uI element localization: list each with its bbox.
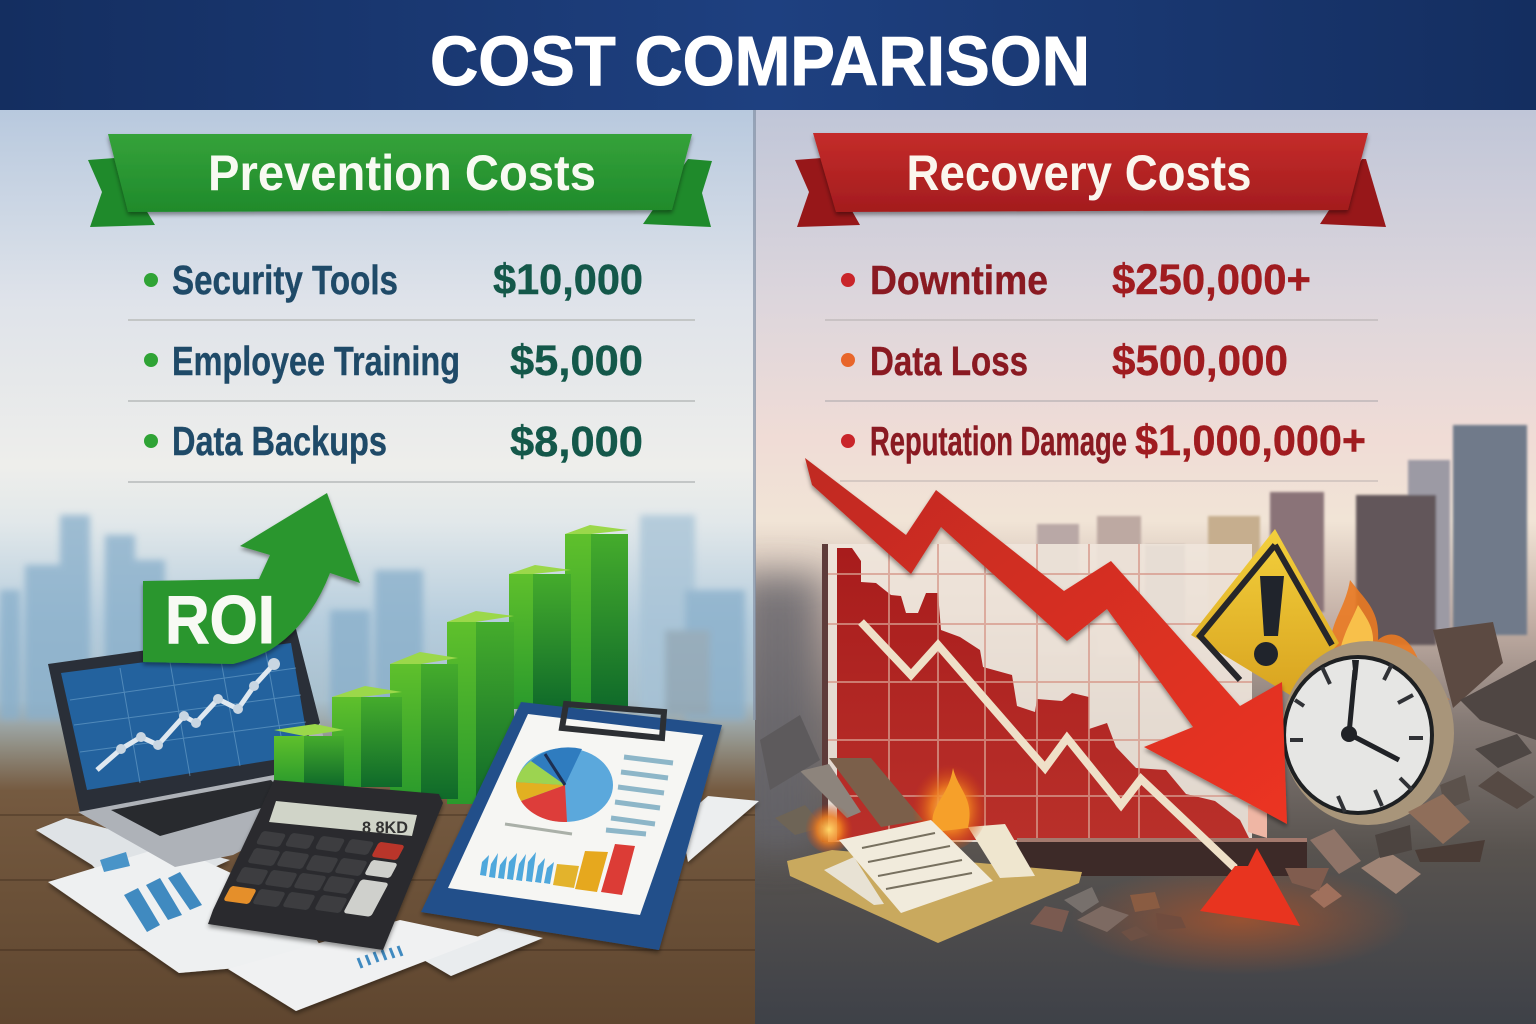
warning sign xyxy=(1191,529,1339,695)
arrow: falling cost xyxy=(805,458,1287,824)
panel: recovery background xyxy=(755,110,1536,1024)
right city skyline xyxy=(1037,425,1527,656)
banner: recovery costs xyxy=(795,133,1386,227)
banner: prevention costs xyxy=(88,134,712,227)
rock behind clock xyxy=(1433,622,1503,708)
row: security tools: $10,000 xyxy=(493,256,643,304)
row: security tools xyxy=(144,256,643,304)
flame: rubble left xyxy=(805,801,853,853)
bar 1 xyxy=(274,724,344,786)
row: downtime xyxy=(841,256,1311,304)
row: reputation damage: $1,000,000+ xyxy=(1135,417,1366,465)
row: data loss: Data Loss xyxy=(870,338,1028,384)
bar 5 xyxy=(509,565,571,709)
clock xyxy=(1282,641,1454,825)
row: employee training: Employee Training xyxy=(172,338,460,384)
calculator display: 8 8KD xyxy=(362,818,408,837)
clipboard report xyxy=(421,702,722,950)
bar 3 xyxy=(390,652,458,799)
flame xyxy=(912,760,988,850)
row: data backups: Data Backups xyxy=(172,418,387,464)
ground and side haze xyxy=(735,575,1410,975)
banner heading: Prevention Costs xyxy=(208,145,596,201)
burning papers xyxy=(787,760,1082,943)
row: reputation damage: Reputation Damage xyxy=(870,418,1127,464)
row: security tools: Security Tools xyxy=(172,257,398,303)
calculator keys xyxy=(223,831,405,917)
row: data backups xyxy=(144,418,643,466)
wood table planks xyxy=(0,815,755,950)
row: data loss: $500,000 xyxy=(1112,337,1288,385)
header band xyxy=(0,0,1536,110)
report bar chart xyxy=(480,844,635,895)
row: downtime: Downtime xyxy=(870,257,1048,303)
documents xyxy=(36,796,759,1011)
prevention cost list xyxy=(128,256,695,483)
row: employee training: $5,000 xyxy=(510,337,643,385)
green bar chart xyxy=(274,525,628,804)
row: data loss xyxy=(841,337,1288,385)
arrow: ROI growth xyxy=(143,493,360,664)
recovery cost list xyxy=(825,256,1378,482)
bar 4 xyxy=(447,611,514,804)
banner heading: Recovery Costs xyxy=(906,145,1252,201)
bar 2 xyxy=(332,686,402,787)
row: data backups: $8,000 xyxy=(510,418,643,466)
rubble pile xyxy=(760,660,1536,941)
calculator xyxy=(208,780,443,950)
red declining area chart xyxy=(822,544,1307,926)
center divider xyxy=(753,110,756,720)
calculator display xyxy=(269,801,417,837)
laptop xyxy=(48,629,335,867)
laptop line chart xyxy=(97,658,280,770)
left city skyline xyxy=(0,515,745,720)
row: downtime: $250,000+ xyxy=(1112,256,1311,304)
pie chart xyxy=(516,747,613,822)
falling trend line xyxy=(861,622,1300,926)
flames behind clock xyxy=(1330,580,1450,700)
panel: prevention background xyxy=(0,110,755,1024)
title: COST COMPARISON xyxy=(430,22,1090,100)
bar 6 xyxy=(565,525,628,709)
ROI label: ROI xyxy=(165,582,275,658)
